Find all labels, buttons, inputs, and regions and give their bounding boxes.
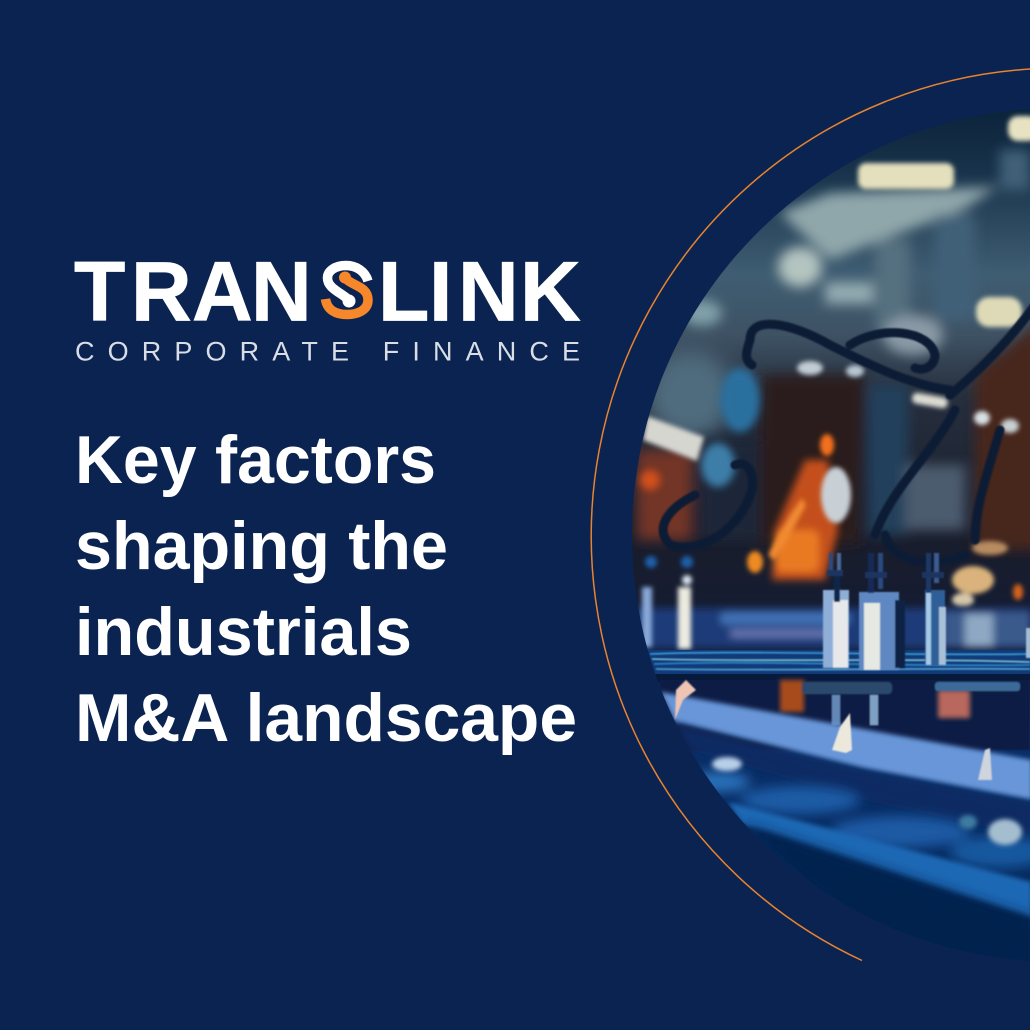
logo: Translink Corporate Finance: [74, 244, 581, 366]
logo wordmark: [74, 244, 581, 338]
logo wordmark: LINK: [378, 244, 581, 338]
title: shaping the: [75, 508, 448, 584]
logo S icon: [326, 266, 368, 314]
machine bodies: [637, 320, 1030, 550]
background bottles and table deck: [632, 556, 1030, 682]
under-table reflections: [660, 680, 1030, 750]
conveyor belts: [660, 680, 1030, 970]
orange arc outline: [591, 69, 1030, 960]
foreground glass bottles and posts: [823, 553, 1030, 670]
photo: factory robots in circular crop: [630, 100, 1030, 970]
cables: [663, 305, 1030, 562]
title: Key factors: [75, 422, 436, 498]
title: M&A landscape: [75, 680, 577, 756]
logo wordmark: TRAN: [74, 244, 312, 338]
logo tagline: CORPORATE FINANCE: [75, 336, 580, 366]
orange glow: [640, 434, 1023, 607]
title: [75, 422, 577, 756]
blurred ceiling lights: [645, 116, 1030, 440]
title: industrials: [75, 594, 412, 670]
